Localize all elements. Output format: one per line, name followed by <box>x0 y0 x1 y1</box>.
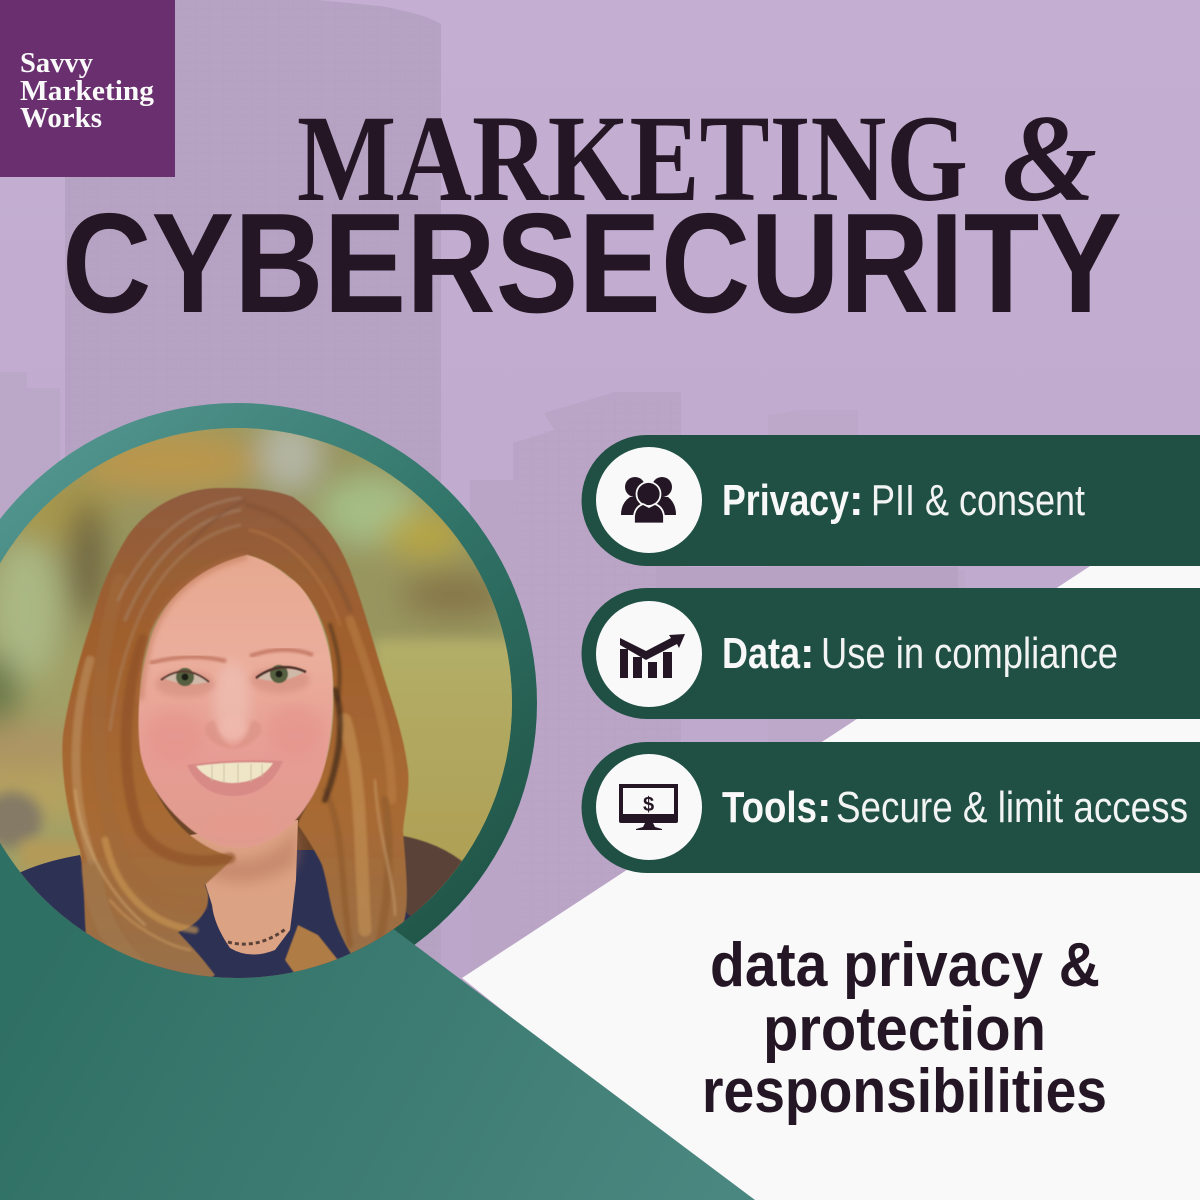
title: MARKETING <box>297 90 968 227</box>
teal corner triangle <box>0 634 755 1200</box>
panel: data: Data <box>722 630 801 678</box>
panel: privacy: : <box>849 477 864 525</box>
face <box>138 555 333 848</box>
portrait ring <box>0 403 537 1003</box>
icon: people <box>621 477 676 524</box>
subtitle: responsibilities <box>702 1057 1107 1126</box>
subtitle <box>702 931 1107 1126</box>
panel: tools: Tools <box>722 784 817 832</box>
panel: tools <box>582 742 1200 873</box>
icon: monitor with dollar sign <box>619 786 678 830</box>
white diagonal panel <box>462 494 1200 1200</box>
logo block: Marketing <box>20 75 154 107</box>
subtitle: protection <box>763 995 1046 1064</box>
panel: tools: : <box>817 784 832 832</box>
logo block: Works <box>20 102 102 134</box>
icon: rising chart <box>620 634 685 678</box>
panel: data: Use in compliance <box>821 630 1118 678</box>
shaded hair behind neck <box>153 786 315 850</box>
eyes <box>161 665 306 686</box>
title <box>62 90 1122 343</box>
logo block <box>0 0 175 177</box>
eye sockets <box>155 671 215 697</box>
panel: data <box>582 588 1200 719</box>
panel: data: : <box>800 630 814 678</box>
logo block: Savvy <box>20 47 93 79</box>
smile <box>187 760 283 796</box>
hair <box>62 488 408 985</box>
nose <box>206 721 260 747</box>
neck and chest <box>190 820 298 955</box>
icon: monitor with dollar sign: $ <box>643 794 654 816</box>
panel: privacy: Privacy <box>722 477 849 525</box>
sweater <box>20 850 421 978</box>
portrait photo <box>0 419 525 990</box>
subtitle: data privacy & <box>710 931 1100 1000</box>
brows <box>150 657 226 663</box>
panel: privacy <box>582 435 1200 566</box>
title: & <box>1002 90 1097 227</box>
panel: privacy: PII & consent <box>871 477 1085 525</box>
